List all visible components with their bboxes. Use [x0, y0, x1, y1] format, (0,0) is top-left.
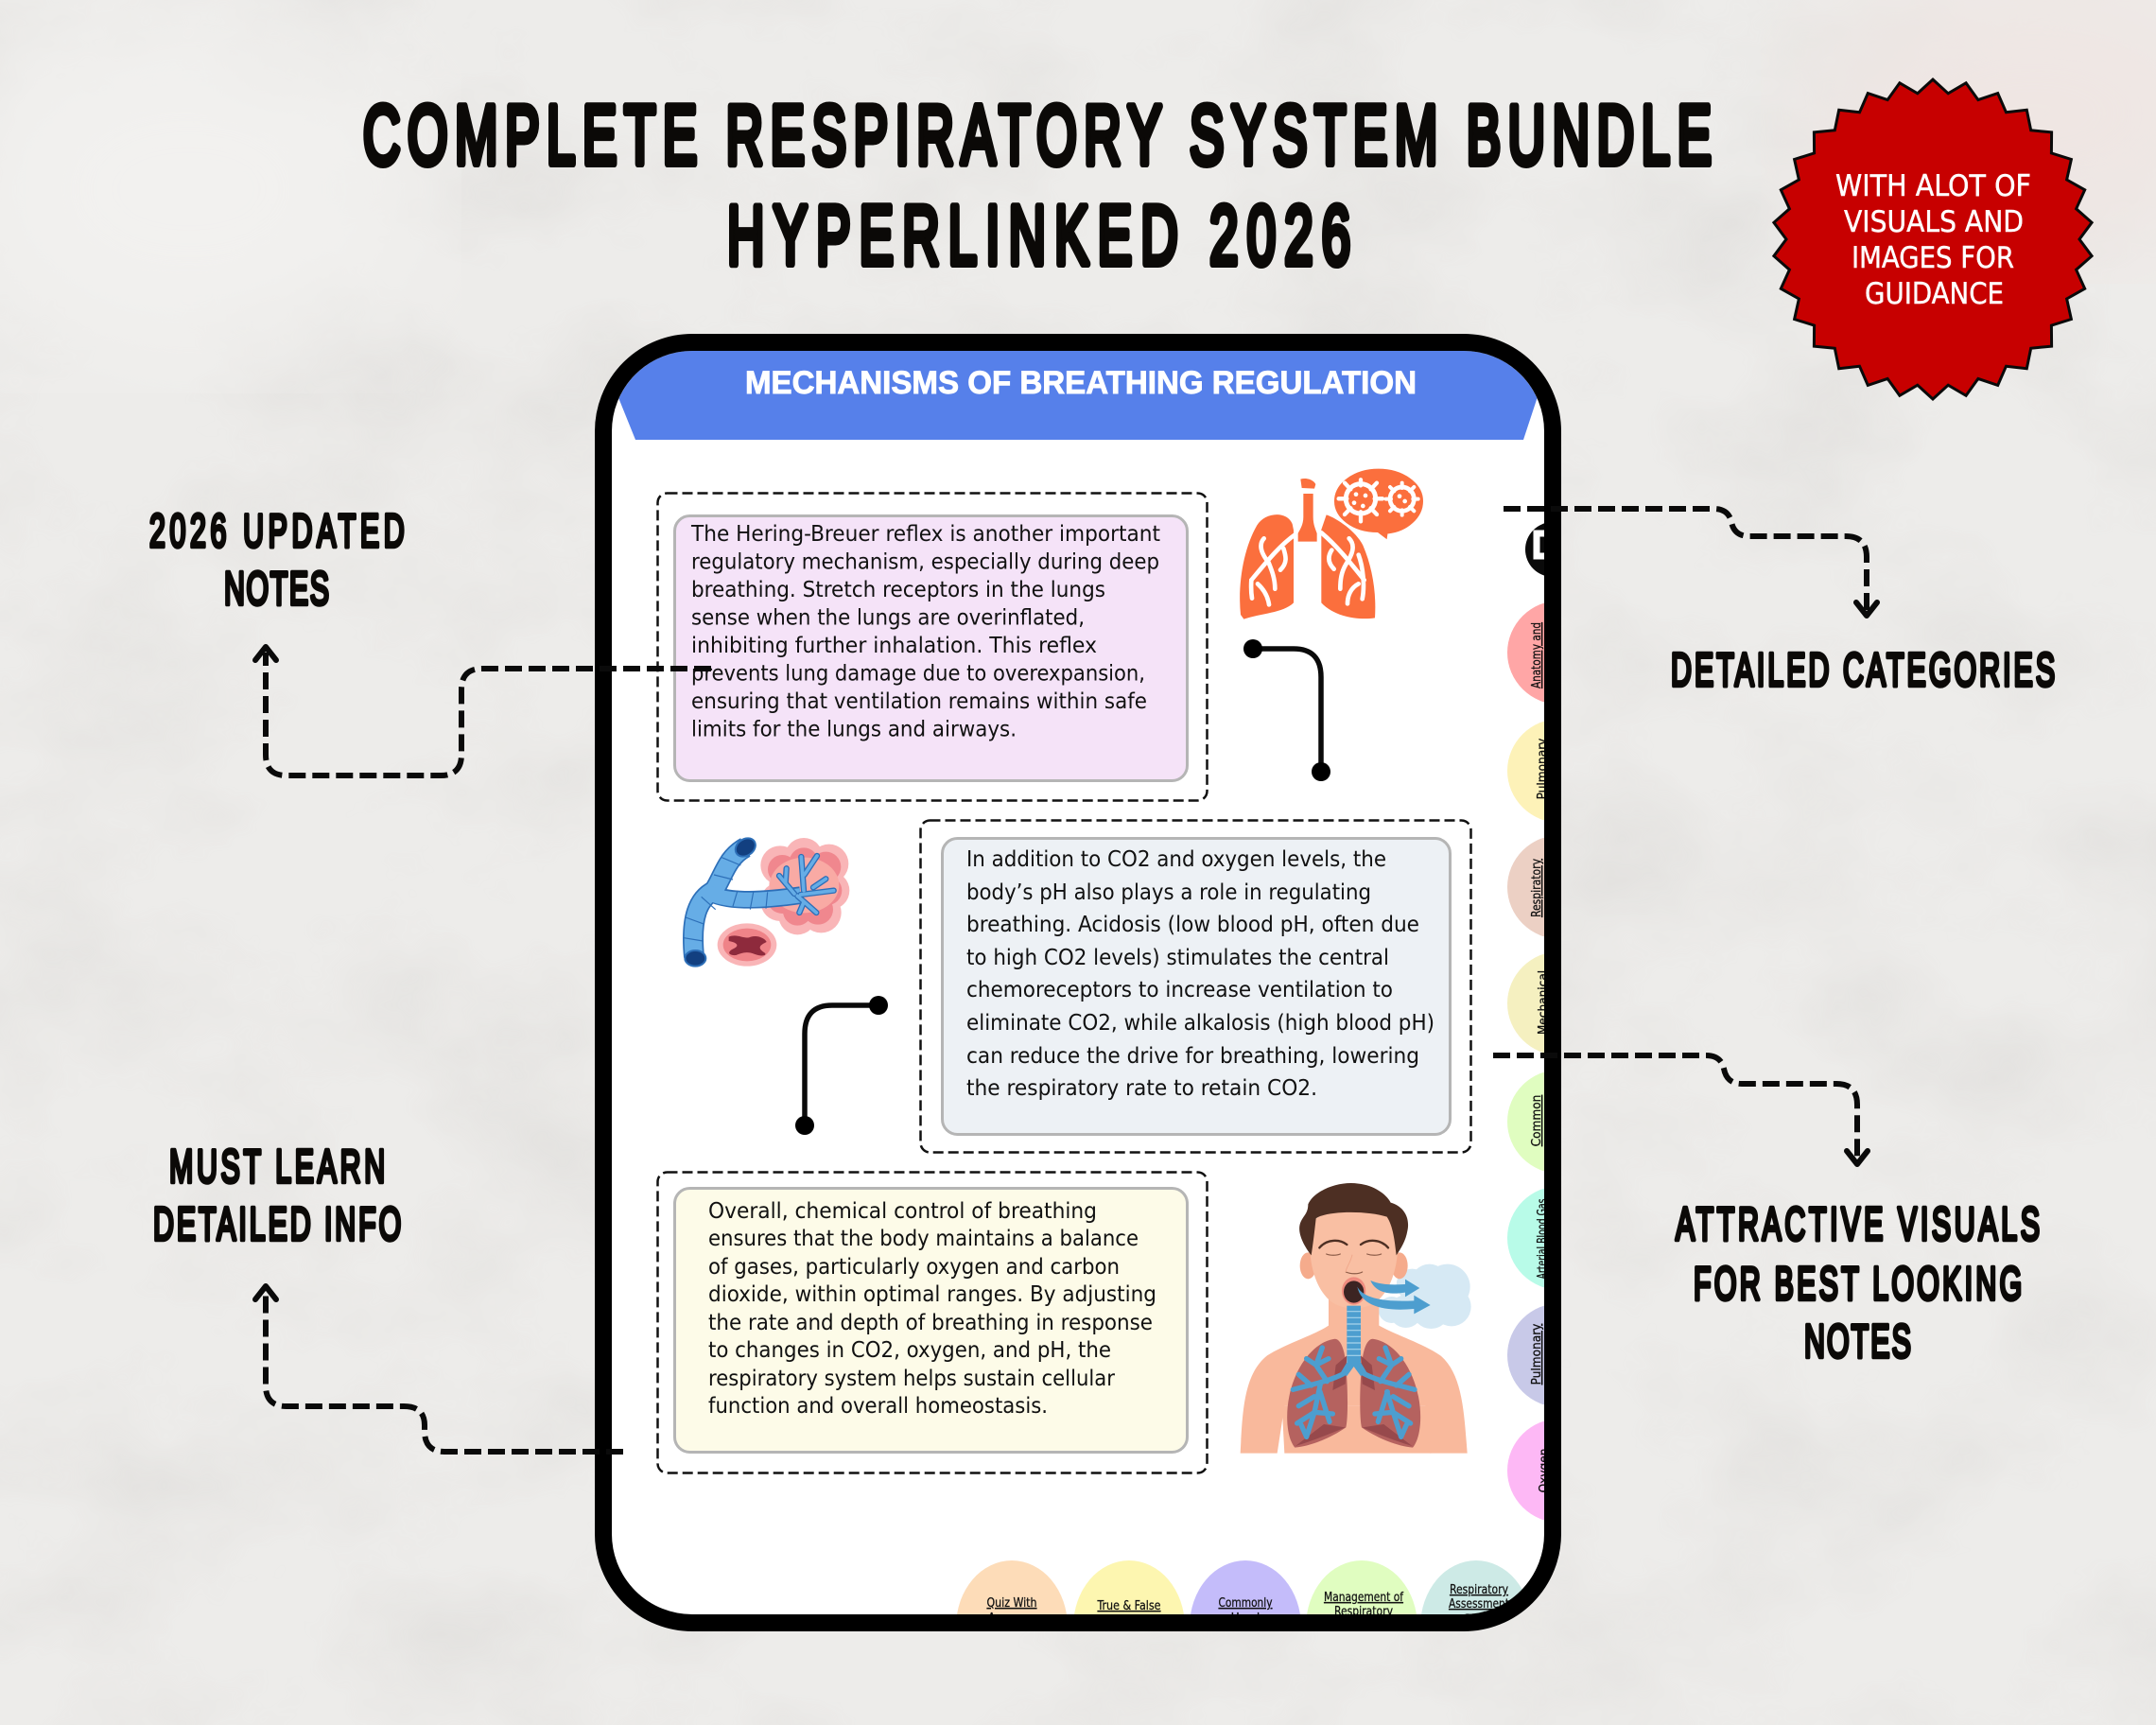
- arrow: to detailed categories: [1504, 509, 1877, 616]
- label: attractive visuals: NOTES: [1804, 1316, 1911, 1368]
- bottom tabs: and: [1465, 1610, 1486, 1625]
- panel: blood pH: can reduce the drive for breathing, lowering: [966, 1044, 1419, 1069]
- bottom tabs: True & False: [1097, 1598, 1161, 1613]
- connector: top right: [1243, 639, 1330, 781]
- side tabs: Oxygen: [1537, 1449, 1552, 1492]
- bottom tabs: Commonly: [1218, 1595, 1273, 1611]
- label: detailed categories: DETAILED CATEGORIES: [1671, 644, 2055, 696]
- panel: chemical control summary: the rate and depth of breathing in response: [708, 1311, 1153, 1335]
- icon: person exhaling with lungs: [1241, 1183, 1471, 1454]
- bottom tabs: Respiratory: [1450, 1582, 1508, 1597]
- panel: chemical control summary: Overall, chemical control of breathing: [708, 1199, 1097, 1224]
- panel: blood pH: chemoreceptors to increase ventilation to: [966, 978, 1393, 1002]
- arrow: to attractive visuals: [1493, 1055, 1868, 1164]
- badge: visuals and images: WITH ALOT OF: [1835, 169, 2031, 203]
- label: 2026 updated notes: [149, 505, 405, 615]
- side tabs: Pulmonary: [1529, 1324, 1544, 1385]
- panel: blood pH: breathing. Acidosis (low blood pH, often due: [966, 913, 1419, 937]
- bottom tabs: Management of: [1324, 1590, 1404, 1605]
- panel: Hering-Breuer reflex: inhibiting further inhalation. This reflex: [691, 634, 1097, 658]
- label: must learn detailed info: [153, 1141, 401, 1250]
- header banner: [600, 351, 1553, 440]
- arrow: to 2026 updated notes: [255, 647, 711, 775]
- bottom tabs: Answers: [987, 1611, 1036, 1626]
- panel: Hering-Breuer reflex: ensuring that ventilation remains within safe: [691, 689, 1147, 714]
- arrow: to must learn: [255, 1286, 623, 1452]
- connector: middle left: [795, 996, 888, 1135]
- bottom tabs: [957, 1560, 1522, 1614]
- side tabs: Respiratory: [1529, 859, 1544, 917]
- bottom tabs: Used: [1231, 1611, 1260, 1626]
- panel: blood pH: the respiratory rate to retain CO2.: [966, 1076, 1317, 1101]
- panel: Hering-Breuer reflex: [658, 494, 1207, 800]
- panel: Hering-Breuer reflex: limits for the lungs and airways.: [691, 717, 1017, 741]
- badge: visuals and images: GUIDANCE: [1865, 277, 2004, 311]
- label: attractive visuals: ATTRACTIVE VISUALS: [1676, 1198, 2040, 1250]
- panel: chemical control summary: [658, 1173, 1207, 1473]
- label: must learn detailed info: MUST LEARN: [169, 1141, 385, 1193]
- label: 2026 updated notes: 2026 UPDATED: [149, 505, 405, 557]
- side tabs: Mechanical: [1536, 970, 1551, 1035]
- panel: chemical control summary: function and overall homeostasis.: [708, 1394, 1048, 1419]
- panel: blood pH: body’s pH also plays a role in regulating: [966, 880, 1371, 905]
- panel: blood pH: to high CO2 levels) stimulates the central: [966, 946, 1389, 970]
- screen contents: [600, 351, 1613, 1693]
- badge: visuals and images: IMAGES FOR: [1852, 241, 2014, 275]
- icon: orange lungs with virus bubble: [1240, 468, 1424, 619]
- label: attractive visuals: FOR BEST LOOKING: [1694, 1258, 2022, 1310]
- label: 2026 updated notes: NOTES: [224, 563, 329, 615]
- cloud of breath: [1379, 1264, 1471, 1329]
- badge: visuals and images: VISUALS AND: [1844, 205, 2024, 239]
- header banner: MECHANISMS OF BREATHING REGULATION: [745, 365, 1417, 401]
- side tabs: Anatomy and: [1529, 622, 1544, 688]
- panel: Hering-Breuer reflex: The Hering-Breuer reflex is another important: [690, 522, 1160, 547]
- title: HYPERLINKED 2026: [727, 189, 1350, 282]
- panel: blood pH: [921, 821, 1471, 1152]
- panel: blood pH: eliminate CO2, while alkalosis (high blood pH): [966, 1011, 1434, 1036]
- bottom tabs: Quiz With: [987, 1595, 1036, 1611]
- panel: Hering-Breuer reflex: prevents lung damage due to overexpansion,: [691, 662, 1145, 687]
- panel: chemical control summary: of gases, particularly oxygen and carbon: [708, 1255, 1120, 1280]
- panel: Hering-Breuer reflex: sense when the lungs are overinflated,: [691, 605, 1085, 630]
- icon: bronchus and alveoli: [684, 834, 849, 967]
- side tabs: Arterial Blood Gas: [1535, 1199, 1550, 1279]
- bottom tabs: Respiratory: [1334, 1604, 1393, 1619]
- label: must learn detailed info: DETAILED INFO: [153, 1198, 401, 1250]
- panel: chemical control summary: respiratory system helps sustain cellular: [708, 1367, 1116, 1391]
- label: attractive visuals: [1676, 1198, 2040, 1368]
- panel: blood pH: In addition to CO2 and oxygen levels, the: [966, 847, 1386, 872]
- panel: chemical control summary: ensures that the body maintains a balance: [708, 1227, 1139, 1251]
- panel: Hering-Breuer reflex: breathing. Stretch receptors in the lungs: [691, 578, 1105, 602]
- tablet frame: [603, 342, 1553, 1623]
- side tabs: Common: [1529, 1095, 1544, 1146]
- tablet screen: [600, 342, 1613, 1693]
- panel: Hering-Breuer reflex: regulatory mechanism, especially during deep: [691, 550, 1159, 575]
- panel: chemical control summary: dioxide, within optimal ranges. By adjusting: [708, 1282, 1156, 1307]
- side tabs: Pulmonary: [1535, 739, 1550, 799]
- badge: visuals and images: [1774, 79, 2092, 399]
- title: [363, 89, 1712, 282]
- side tabs: [1507, 523, 1544, 1521]
- bottom tabs: Assessment: [1449, 1596, 1509, 1612]
- panel: chemical control summary: to changes in CO2, oxygen, and pH, the: [708, 1338, 1111, 1363]
- title: COMPLETE RESPIRATORY SYSTEM BUNDLE: [363, 89, 1712, 182]
